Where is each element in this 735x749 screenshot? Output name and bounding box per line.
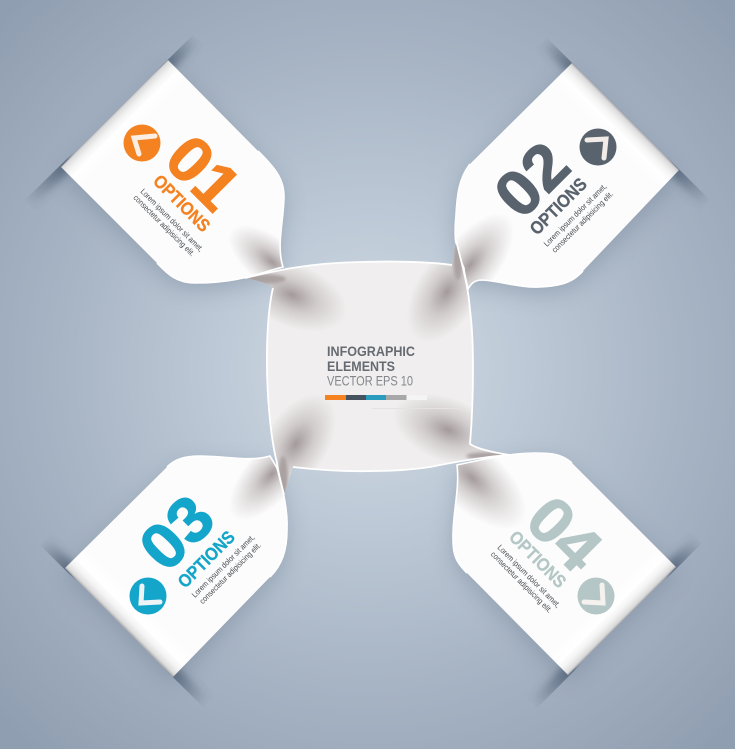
card shadows: [61, 67, 679, 684]
options label 02: OPTIONS: [526, 174, 591, 239]
colour bar: [325, 395, 427, 400]
paper 04: [453, 453, 676, 675]
number 03: 03: [125, 481, 228, 584]
options label 03: OPTIONS: [174, 527, 239, 592]
description 01: Lorem ipsum dolor sit amet,: [139, 187, 205, 254]
panel: option 03: [65, 455, 288, 677]
subheading: VECTOR EPS 10: [327, 372, 413, 388]
paper 01: [61, 60, 284, 283]
edge 01: [157, 151, 284, 283]
panel: option 02: [454, 63, 679, 290]
fold shading 03: [234, 457, 282, 515]
description 01: consectetur adipisicing elit.: [132, 193, 197, 258]
description 04: consectetur adipisicing elit.: [489, 550, 554, 615]
centre edge: [245, 240, 510, 495]
centre fold shading: [248, 242, 502, 493]
edge 03: [167, 456, 287, 577]
fold shading 01: [234, 229, 282, 274]
panel: centre: [245, 241, 510, 495]
panel: option 04: [452, 452, 676, 675]
description 03: Lorem ipsum dolor sit amet,: [190, 533, 257, 599]
number 02: 02: [480, 128, 583, 231]
centre paper: [245, 240, 510, 495]
icon: blue chevron 03: [130, 578, 166, 614]
fold shading 04: [457, 458, 520, 524]
options label 01: OPTIONS: [149, 171, 214, 236]
icon: orange chevron 01: [124, 124, 160, 162]
paper 02: [455, 63, 679, 289]
icon: grey chevron 02: [580, 128, 616, 166]
panel: option 01: [61, 60, 285, 284]
paper 03: [65, 456, 287, 677]
description 02: Lorem ipsum dolor sit amet,: [542, 182, 609, 248]
edge 04: [453, 453, 572, 573]
heading: ELEMENTS: [327, 358, 395, 374]
options label 04: OPTIONS: [505, 527, 570, 592]
heading: INFOGRAPHIC: [327, 343, 415, 359]
heading: [327, 343, 415, 374]
fold shading 02: [458, 220, 508, 287]
number 01: 01: [152, 121, 255, 224]
edge 02: [455, 164, 583, 289]
description 04: Lorem ipsum dolor sit amet,: [496, 543, 562, 610]
number 04: 04: [513, 482, 616, 586]
icon: sage chevron 04: [578, 578, 614, 614]
description 02: consectetur adipisicing elit.: [550, 189, 615, 254]
description 03: consectetur adipisicing elit.: [198, 541, 263, 606]
